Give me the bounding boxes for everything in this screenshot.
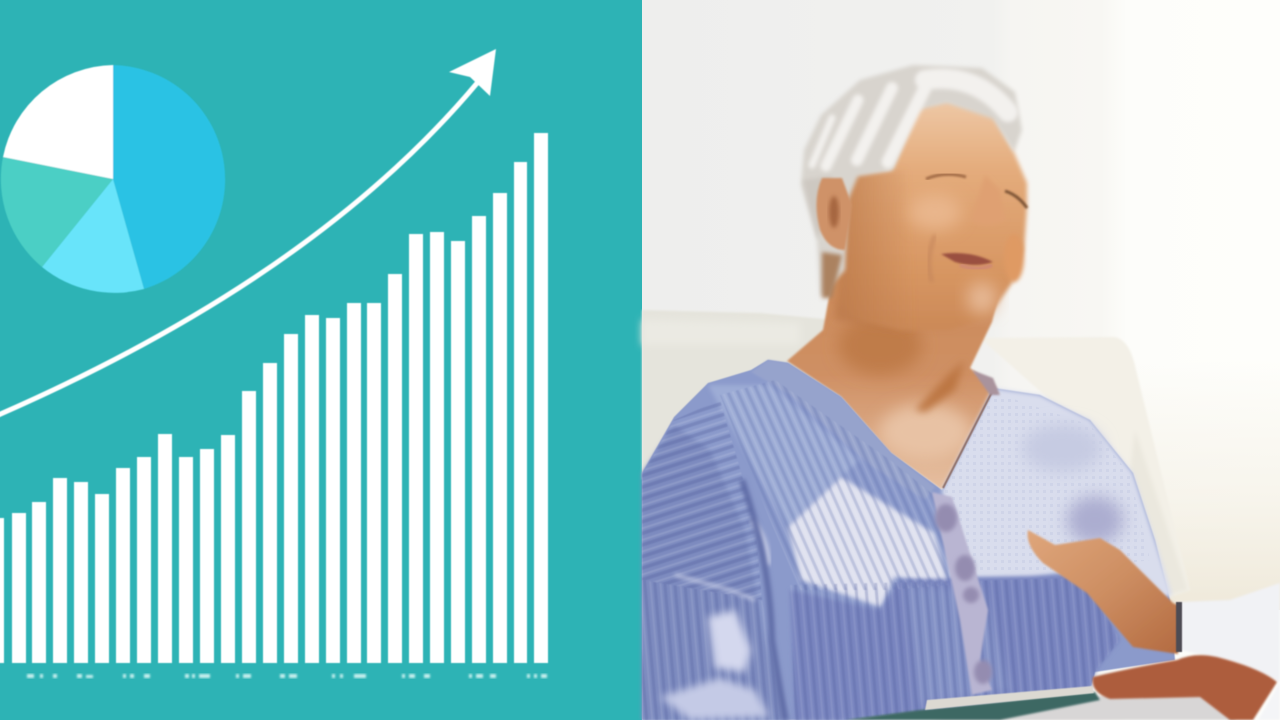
nose [970, 175, 1006, 225]
doctor hand [1093, 655, 1277, 720]
pie slice: blue [113, 65, 225, 289]
upper chest shade [1022, 424, 1102, 472]
arrow: rising trend [0, 49, 496, 416]
panel: photo of senior patient [642, 0, 1280, 720]
chair back right [980, 337, 1190, 610]
pie chart [1, 65, 225, 293]
chair back left [642, 310, 835, 480]
bar chart [0, 133, 548, 663]
lower lip [960, 265, 992, 268]
cheek [909, 194, 961, 230]
eye left [926, 174, 966, 179]
lower body darker [790, 575, 1120, 720]
collar right [972, 370, 1000, 395]
sweater [642, 360, 1175, 720]
axis tick marks (illegible in reference) [27, 674, 547, 678]
right chest pale knit [942, 388, 1172, 610]
pie slice: white [3, 65, 113, 179]
upper left chest [708, 385, 860, 527]
pie slice: light cyan [42, 179, 144, 293]
left sleeve shade [642, 425, 790, 720]
right cheek [1004, 234, 1024, 282]
table surface [930, 692, 1236, 720]
chest highlight [879, 404, 971, 460]
neckline edge [943, 390, 993, 488]
arrow head [449, 49, 496, 96]
hand and wrist [1028, 530, 1180, 654]
button placket [932, 492, 992, 695]
lower body ribbing [790, 578, 1120, 720]
left arm ribbing top [642, 400, 762, 600]
hair side shadow [803, 176, 832, 240]
head [801, 65, 1027, 335]
sleeve seam dark [742, 480, 785, 720]
face side shade [835, 170, 915, 335]
sleeve seam highlight [752, 520, 768, 565]
doctor coat sleeve [1180, 583, 1280, 682]
face [830, 100, 1027, 330]
collar band [751, 360, 935, 500]
chin highlight [967, 282, 997, 314]
upper neck shadow [838, 315, 922, 375]
right chest knit texture [945, 392, 1150, 575]
lower centre lighter [905, 585, 1010, 705]
clipboard shadow [845, 692, 1100, 720]
arrow shaft [0, 82, 478, 416]
hair light streaks [812, 79, 1008, 166]
chair inner shade [1130, 430, 1188, 596]
sleeve sun band [660, 678, 770, 720]
throat shadow [915, 360, 965, 412]
ear [816, 178, 852, 250]
shirt cuff [1176, 602, 1182, 652]
chest ribbing [720, 380, 950, 590]
sleeve crease light [675, 575, 755, 600]
right chest lavender shade [1067, 496, 1123, 544]
clipboard edge [925, 686, 1094, 710]
buttons [935, 504, 992, 684]
photo background wall [642, 0, 1280, 720]
nape hair [822, 252, 842, 298]
doctor coat lower edge [1258, 682, 1280, 720]
neck and chest [787, 260, 1000, 490]
lower curtain tint [1130, 360, 1280, 610]
neck skin [787, 260, 1000, 490]
pie slice: aqua [1, 157, 113, 267]
patient hand [1028, 530, 1182, 654]
hair mass [801, 65, 1022, 297]
clipboard [845, 686, 1100, 720]
sweater body [642, 360, 1175, 720]
sleeve sun patch [708, 610, 751, 672]
ear shadow [829, 196, 839, 228]
left arm ribbing bottom [642, 580, 785, 720]
mouth [941, 253, 993, 265]
chair top highlight [642, 320, 800, 345]
eye right [1005, 191, 1027, 208]
thin sun streak [848, 638, 860, 712]
panel: teal chart background [0, 0, 642, 720]
armchair [642, 310, 1190, 610]
smile crease [929, 235, 935, 282]
left chest sun patch [788, 477, 948, 607]
